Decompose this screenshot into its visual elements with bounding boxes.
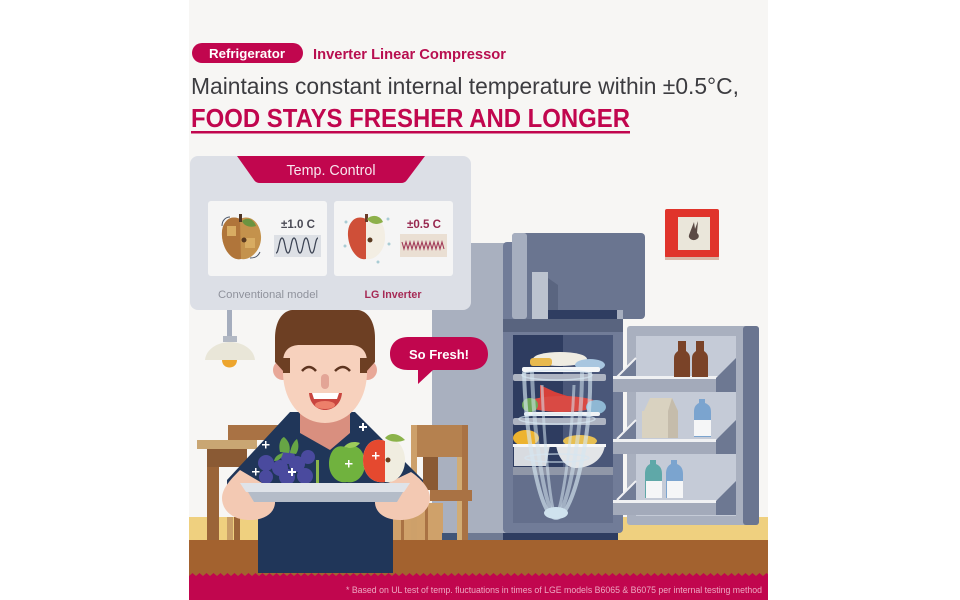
chart: narrow fluctuation wave	[400, 234, 447, 257]
conventional label: Conventional model	[218, 289, 318, 301]
chart: wide fluctuation wave	[274, 235, 321, 257]
wall clock picture	[665, 209, 719, 260]
plate of food	[522, 352, 605, 372]
headline line one: Maintains constant internal temperature within ±0.5°C,	[191, 73, 739, 99]
LG label: LG Inverter	[364, 289, 422, 301]
nose	[321, 374, 329, 389]
tray	[240, 483, 410, 502]
grapes	[258, 450, 315, 485]
teal bottle	[645, 460, 662, 498]
panel header	[237, 156, 425, 183]
green apple	[329, 446, 365, 482]
blue bottle lower	[666, 460, 683, 498]
footnote: * Based on UL test of temp. fluctuations in times of LGE models B6065 & B6075 per internal testing method	[346, 585, 762, 596]
cold air swirl	[519, 370, 595, 518]
footer band	[189, 572, 768, 600]
door shelves	[613, 358, 736, 392]
torso	[227, 412, 423, 573]
panel header: Temp. Control	[286, 162, 376, 179]
LG card	[334, 201, 453, 276]
milk carton	[642, 398, 678, 438]
conventional card	[208, 201, 327, 276]
speech bubble: So Fresh!	[409, 347, 469, 362]
pendant lamp	[205, 310, 255, 368]
refrigerator	[432, 233, 759, 540]
icon: spoiled apple	[222, 214, 261, 259]
dining table and chairs	[197, 425, 472, 540]
fridge body side	[432, 243, 514, 533]
paper background	[189, 0, 768, 600]
fridge front	[503, 242, 623, 533]
wainscot strip on wall	[189, 517, 768, 541]
fridge divider	[503, 319, 623, 332]
shelves	[513, 374, 606, 381]
blue bottle	[694, 399, 711, 437]
neck	[300, 410, 350, 450]
freezer door	[512, 233, 645, 319]
floor	[189, 540, 768, 576]
conventional value: ±1.0 C	[281, 217, 315, 231]
man	[222, 310, 430, 573]
red apple	[363, 434, 405, 482]
face	[283, 345, 367, 423]
watermelon plate	[522, 385, 606, 416]
bowl of fruit	[513, 430, 606, 468]
mouth	[309, 393, 342, 410]
sparkles	[252, 423, 380, 476]
ears	[273, 360, 293, 380]
category pill: Refrigerator	[209, 46, 285, 61]
eyes	[302, 367, 350, 371]
icon: fresh apple	[344, 214, 390, 264]
arms and hands	[222, 470, 275, 520]
subtitle: Inverter Linear Compressor	[313, 46, 506, 63]
temperature control panel	[190, 156, 471, 310]
brown bottles	[674, 341, 708, 377]
category pill	[192, 43, 303, 63]
fridge interior	[513, 335, 613, 467]
LG value: ±0.5 C	[407, 217, 441, 231]
grape leaves	[274, 437, 319, 483]
open fridge door	[613, 326, 759, 525]
speech bubble	[390, 337, 488, 384]
headline line two: FOOD STAYS FRESHER AND LONGER	[191, 103, 630, 133]
hair	[275, 310, 375, 372]
